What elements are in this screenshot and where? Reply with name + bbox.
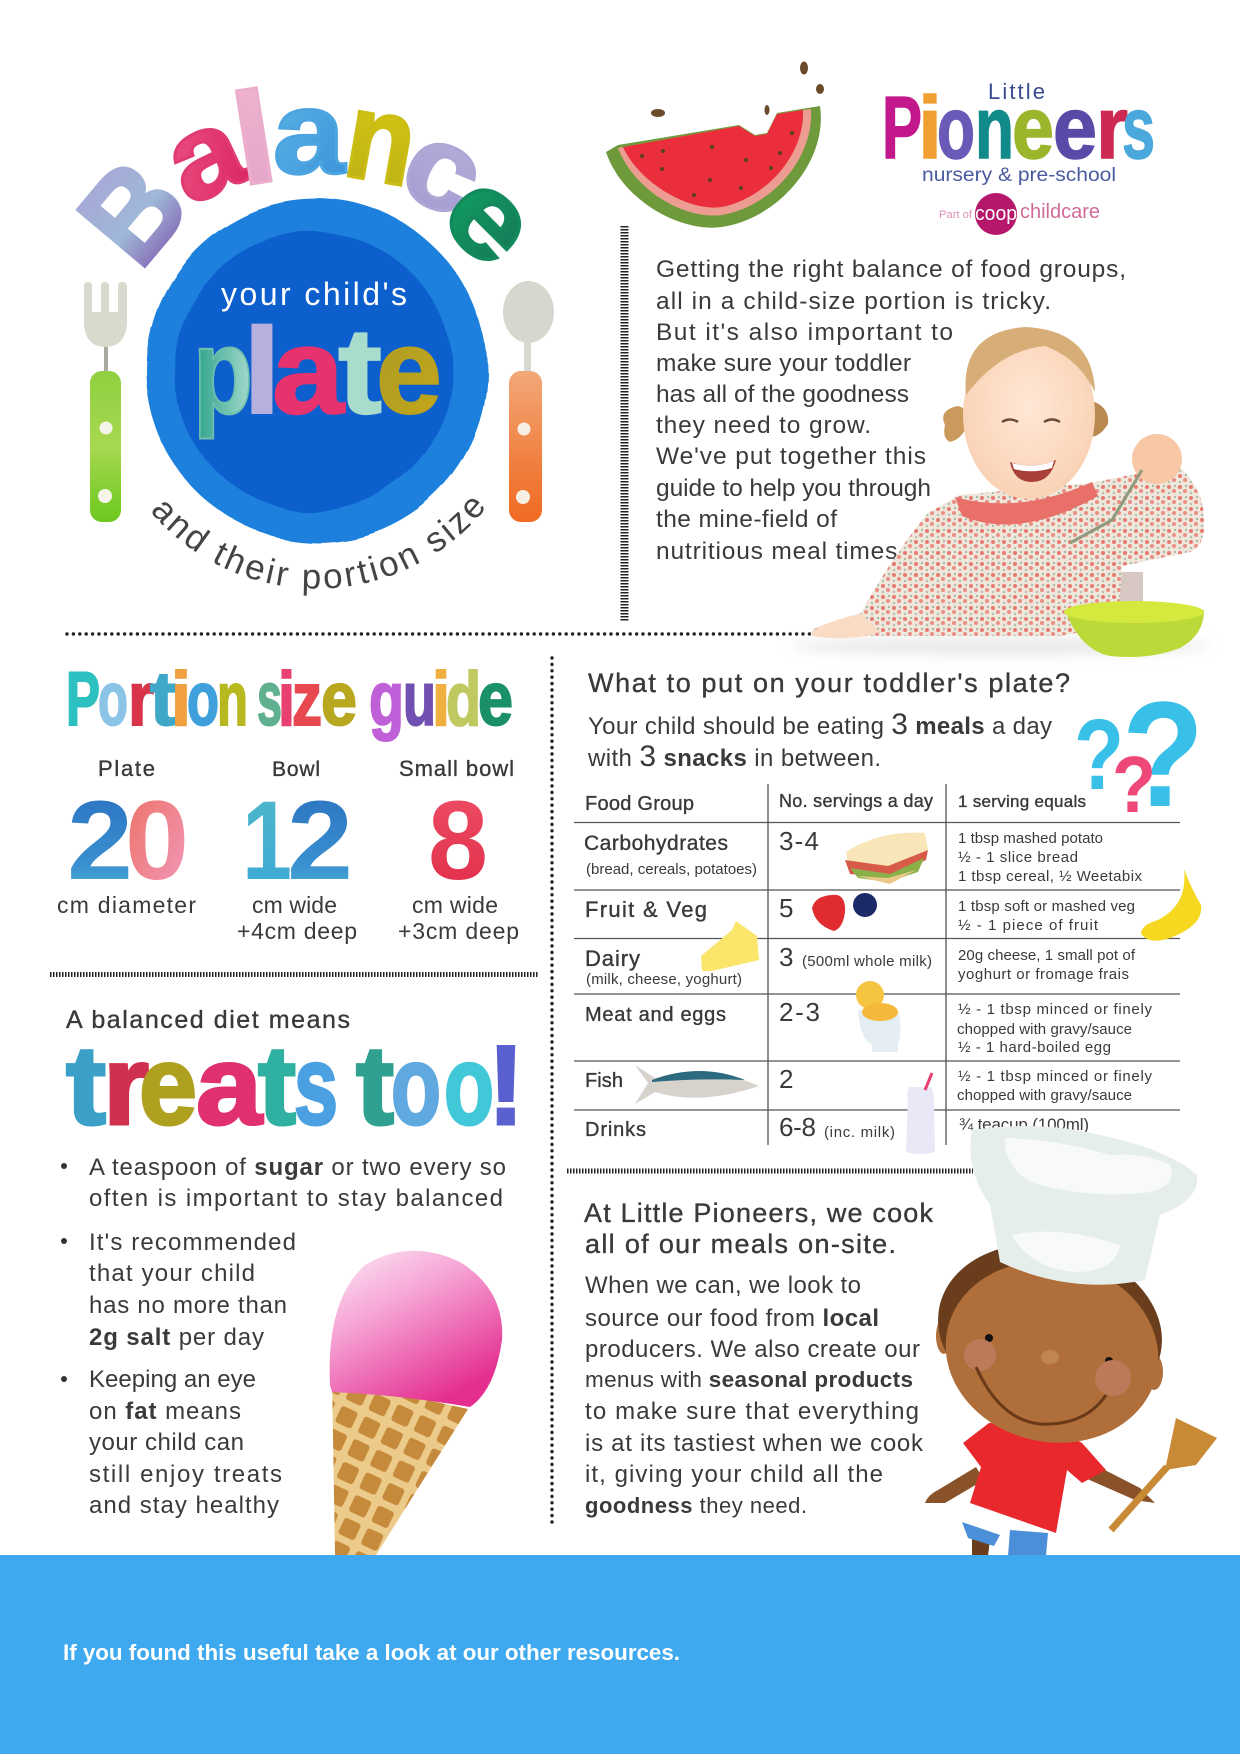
row: carbohydrates: ½ - 1 slice bread — [958, 849, 1078, 866]
row: carbohydrates: Carbohydrates — [584, 832, 728, 855]
blue watercolour plate — [146, 199, 486, 541]
table header: No. servings a day — [779, 791, 933, 811]
column: bowl size: 1 — [242, 778, 292, 903]
logo word: Pioneers — [882, 78, 1155, 177]
row: meat and eggs: ½ - 1 tbsp minced or finely — [958, 1001, 1152, 1018]
heading: Portion size guide: P — [66, 657, 100, 742]
heading: treats too!: o — [444, 1023, 494, 1148]
heading: treats too! — [66, 1023, 524, 1148]
logo word: Pioneers: o — [937, 78, 975, 177]
row: fruit and veg: ½ - 1 piece of fruit — [958, 917, 1099, 934]
row: drinks: 6-8 — [779, 1112, 816, 1142]
row: meat and eggs: chopped with gravy/sauce — [957, 1021, 1132, 1038]
column: bowl size: 2 — [287, 778, 353, 903]
row: meat and eggs — [585, 997, 1152, 1056]
body text: producers. We also create our — [585, 1336, 920, 1363]
your child's: your child's — [221, 276, 407, 312]
bullet: salt: has no more than — [89, 1292, 287, 1319]
intro text: they need to grow. — [656, 412, 871, 439]
heading: treats too!: o — [391, 1023, 441, 1148]
row: carbohydrates: 1 tbsp cereal, ½ Weetabix — [958, 868, 1142, 885]
row: carbohydrates — [584, 826, 1142, 885]
bullet: salt: It's recommended — [89, 1229, 296, 1256]
icon: strawberry — [812, 895, 845, 931]
heading: Portion size guide: i — [432, 657, 450, 742]
bullet: sugar: often is important to stay balanced — [89, 1185, 503, 1212]
title word: Balance: a — [144, 79, 266, 230]
bullet: sugar — [61, 1154, 506, 1212]
title word: Balance: a — [273, 67, 346, 199]
title word: Balance: B — [52, 134, 215, 290]
heading: Portion size guide: d — [446, 657, 481, 742]
row: fish — [585, 1064, 1152, 1104]
title block: balance your child's plate — [52, 63, 565, 596]
face — [929, 1242, 1175, 1462]
title word: Balance — [52, 63, 565, 291]
row: fish: chopped with gravy/sauce — [957, 1087, 1132, 1104]
bullet: fat: on fat means — [89, 1398, 241, 1425]
table header — [585, 791, 1086, 815]
illustration: chef boy — [922, 1126, 1217, 1556]
row: meat and eggs: 2-3 — [779, 997, 820, 1027]
title word: plate: l — [243, 303, 281, 439]
heading: What to put on your toddler's plate? — [588, 668, 1070, 698]
row: carbohydrates: 3-4 — [779, 826, 819, 856]
part of coop childcare: Part of — [939, 209, 973, 221]
intro text: Getting the right balance of food groups, — [656, 256, 1126, 283]
heading: treats too!: s — [294, 1023, 338, 1148]
title word: plate: a — [272, 303, 345, 439]
logo word: Pioneers: i — [918, 78, 942, 177]
heading: Portion size guide: e — [321, 657, 357, 742]
heading: Portion size guide — [66, 657, 513, 742]
heading: Portion size guide: s — [257, 657, 282, 742]
title word: Balance: n — [336, 65, 427, 213]
footer band — [0, 1555, 1240, 1754]
title word: Balance: l — [223, 63, 285, 213]
icon: question marks: ? — [1074, 699, 1124, 811]
heading: treats too!: e — [139, 1023, 197, 1148]
heading: treats too!: t — [258, 1023, 296, 1148]
icon: mackerel fish — [635, 1065, 759, 1104]
body text: source our food from local — [585, 1305, 879, 1332]
row: dairy: 3 — [779, 942, 793, 972]
heading: Portion size guide: r — [128, 657, 154, 742]
and their portion size — [150, 503, 490, 589]
heading: Portion size guide: z — [292, 657, 322, 742]
icon: ice cream cone — [330, 1251, 502, 1555]
column: bowl size: +4cm deep — [237, 918, 357, 944]
row: drinks: (inc. milk) — [824, 1124, 895, 1141]
legs and shorts — [962, 1522, 1048, 1556]
column: plate size: 0 — [125, 778, 189, 903]
bullet: salt — [61, 1229, 296, 1351]
title word: Balance: e — [418, 144, 565, 291]
icon: milk bottle — [906, 1073, 935, 1154]
row: drinks: Drinks — [585, 1119, 646, 1141]
row: fruit and veg: 1 tbsp soft or mashed veg — [958, 898, 1135, 915]
intro text: make sure your toddler — [656, 350, 911, 377]
logo word: Pioneers: P — [882, 78, 922, 177]
body text: When we can, we look to — [585, 1272, 861, 1299]
intro sentence: Your child should be eating 3 meals a day — [588, 708, 1052, 741]
logo: Little Pioneers nursery and pre-school — [882, 78, 1155, 235]
column: bowl size — [237, 758, 357, 944]
panel: portion size guide — [57, 657, 519, 944]
title block: balance your child's plate: and their portion size — [152, 498, 484, 596]
heading: Portion size guide: u — [403, 657, 436, 742]
title word: Balance: c — [383, 94, 504, 244]
bullet: fat: still enjoy treats — [89, 1461, 282, 1488]
column: small bowl size: Small bowl — [399, 756, 514, 781]
heading: Portion size guide: t — [150, 657, 176, 742]
intro sentence — [587, 708, 1052, 773]
body text: goodness they need. — [585, 1493, 807, 1518]
column: plate size: 2 — [67, 778, 133, 903]
bullet: fat: Keeping an eye — [89, 1366, 256, 1393]
body text — [585, 1272, 924, 1518]
row: fish: ½ - 1 tbsp minced or finely — [958, 1068, 1152, 1085]
icon: cheese — [701, 921, 759, 971]
bullet: fat: and stay healthy — [89, 1492, 279, 1519]
bullet: fat: your child can — [89, 1429, 244, 1456]
heading: treats too!: r — [103, 1023, 149, 1148]
body text: menus with seasonal products — [585, 1367, 913, 1392]
body text: is at its tastiest when we cook — [585, 1430, 924, 1457]
row: carbohydrates: (bread, cereals, potatoes) — [586, 861, 757, 878]
body text: it, giving your child all the — [585, 1461, 883, 1488]
icon: banana — [1141, 869, 1201, 941]
bullet: fat — [61, 1366, 282, 1519]
title word: plate: p — [193, 303, 253, 439]
icon: question marks: ? — [1112, 740, 1156, 829]
icon: question marks — [1074, 670, 1204, 838]
icon: blueberry — [853, 893, 877, 917]
row: dairy: (milk, cheese, yoghurt) — [586, 971, 742, 988]
icon: sandwich — [845, 833, 928, 884]
logo word: Pioneers: s — [1122, 78, 1155, 177]
panel: cooking on-site — [584, 1198, 934, 1518]
row: dairy: (500ml whole milk) — [802, 953, 932, 970]
row: drinks — [585, 1112, 1089, 1142]
heading — [584, 1198, 934, 1259]
bullet: salt: 2g salt per day — [89, 1324, 264, 1351]
column: small bowl size: cm wide — [412, 892, 498, 918]
heading: treats too!: t — [66, 1023, 106, 1148]
column: plate size: Plate — [98, 756, 155, 781]
heading: Portion size guide: o — [187, 657, 219, 742]
row: meat and eggs: ½ - 1 hard-boiled egg — [958, 1039, 1111, 1056]
column: small bowl size — [398, 756, 519, 944]
row: fruit and veg: 5 — [779, 893, 793, 923]
intro text: guide to help you through — [656, 475, 931, 502]
row: fruit and veg: Fruit & Veg — [585, 897, 707, 922]
panel: treats too — [61, 1006, 524, 1555]
intro text: nutritious meal times. — [656, 538, 905, 565]
heading: treats too!: t — [356, 1023, 394, 1148]
column: small bowl size: 8 — [428, 778, 488, 903]
column: plate size: cm diameter — [57, 892, 196, 918]
row: fruit and veg — [585, 893, 1135, 934]
ears and hair — [936, 1318, 952, 1354]
spatula — [1111, 1418, 1217, 1530]
column: plate size — [57, 756, 196, 918]
heading: treats too!: ! — [488, 1023, 524, 1148]
row: fish: 2 — [779, 1064, 793, 1094]
row: dairy: 20g cheese, 1 small pot of — [958, 947, 1136, 964]
footer text: If you found this useful take a look at our other resources. — [63, 1640, 680, 1665]
row: dairy: yoghurt or fromage frais — [958, 966, 1129, 983]
photo: toddler eating with spoon and bowl — [790, 327, 1210, 657]
table header: Food Group — [585, 793, 694, 815]
intro text: the mine-field of — [656, 506, 837, 533]
heading: Portion size guide: e — [478, 657, 513, 742]
logo word: Pioneers: r — [1096, 78, 1128, 177]
heading: all of our meals on-site. — [585, 1229, 896, 1259]
heading: Portion size guide: g — [369, 657, 404, 742]
logo strapline: nursery & pre-school — [922, 165, 1116, 186]
icon: question marks: ? — [1122, 670, 1204, 838]
intro sentence: with 3 snacks in between. — [587, 740, 881, 773]
chef hat — [970, 1126, 1197, 1285]
heading: Portion size guide: n — [217, 657, 248, 742]
heading: At Little Pioneers, we cook — [584, 1198, 934, 1228]
title word: plate: e — [376, 303, 442, 439]
row: meat and eggs: Meat and eggs — [585, 1004, 726, 1026]
row: dairy: Dairy — [585, 946, 640, 971]
part of coop childcare: coop — [975, 203, 1017, 225]
heading: Portion size guide: i — [278, 657, 295, 742]
row: carbohydrates: 1 tbsp mashed potato — [958, 830, 1103, 847]
arms — [925, 1465, 1155, 1503]
t-shirt — [963, 1420, 1106, 1533]
intro text: all in a child-size portion is tricky. — [656, 288, 1051, 315]
row: fish: Fish — [585, 1070, 623, 1092]
column: bowl size: Bowl — [272, 758, 320, 781]
subheading: a balanced diet means: A balanced diet means — [66, 1006, 350, 1034]
intro text — [656, 256, 1126, 565]
column: bowl size: cm wide — [252, 892, 337, 918]
table header: 1 serving equals — [958, 792, 1086, 811]
table: food groups — [574, 784, 1180, 1145]
title word: plate: t — [338, 303, 382, 439]
bullet: sugar: A teaspoon of sugar or two every so — [89, 1154, 506, 1181]
bullet: salt: that your child — [89, 1260, 255, 1287]
heading: treats too!: a — [196, 1023, 263, 1148]
icon: eggs in cups — [856, 981, 900, 1052]
intro text: We've put together this — [656, 443, 926, 470]
part of coop childcare — [939, 193, 1100, 235]
heading: Portion size guide: i — [171, 657, 191, 742]
panel: what to put on your toddler's plate — [574, 668, 1204, 1154]
icon: fork — [84, 282, 127, 522]
logo word: Little: Little — [988, 79, 1045, 104]
part of coop childcare: childcare — [1020, 201, 1100, 223]
heading: Portion size guide: o — [98, 657, 128, 742]
intro text: has all of the goodness — [656, 381, 909, 408]
icon: spoon — [503, 281, 554, 522]
icon: watermelon slice — [606, 62, 824, 228]
column: small bowl size: +3cm deep — [398, 918, 519, 944]
row: drinks: ¾ teacup (100ml) — [959, 1115, 1089, 1134]
intro text: But it's also important to — [656, 319, 953, 346]
logo word: Pioneers: n — [975, 78, 1014, 177]
title word: plate — [193, 303, 442, 439]
row: dairy — [585, 942, 1136, 988]
logo word: Pioneers: e — [1012, 78, 1054, 177]
body text: to make sure that everything — [585, 1398, 919, 1425]
logo word: Pioneers: e — [1053, 78, 1097, 177]
